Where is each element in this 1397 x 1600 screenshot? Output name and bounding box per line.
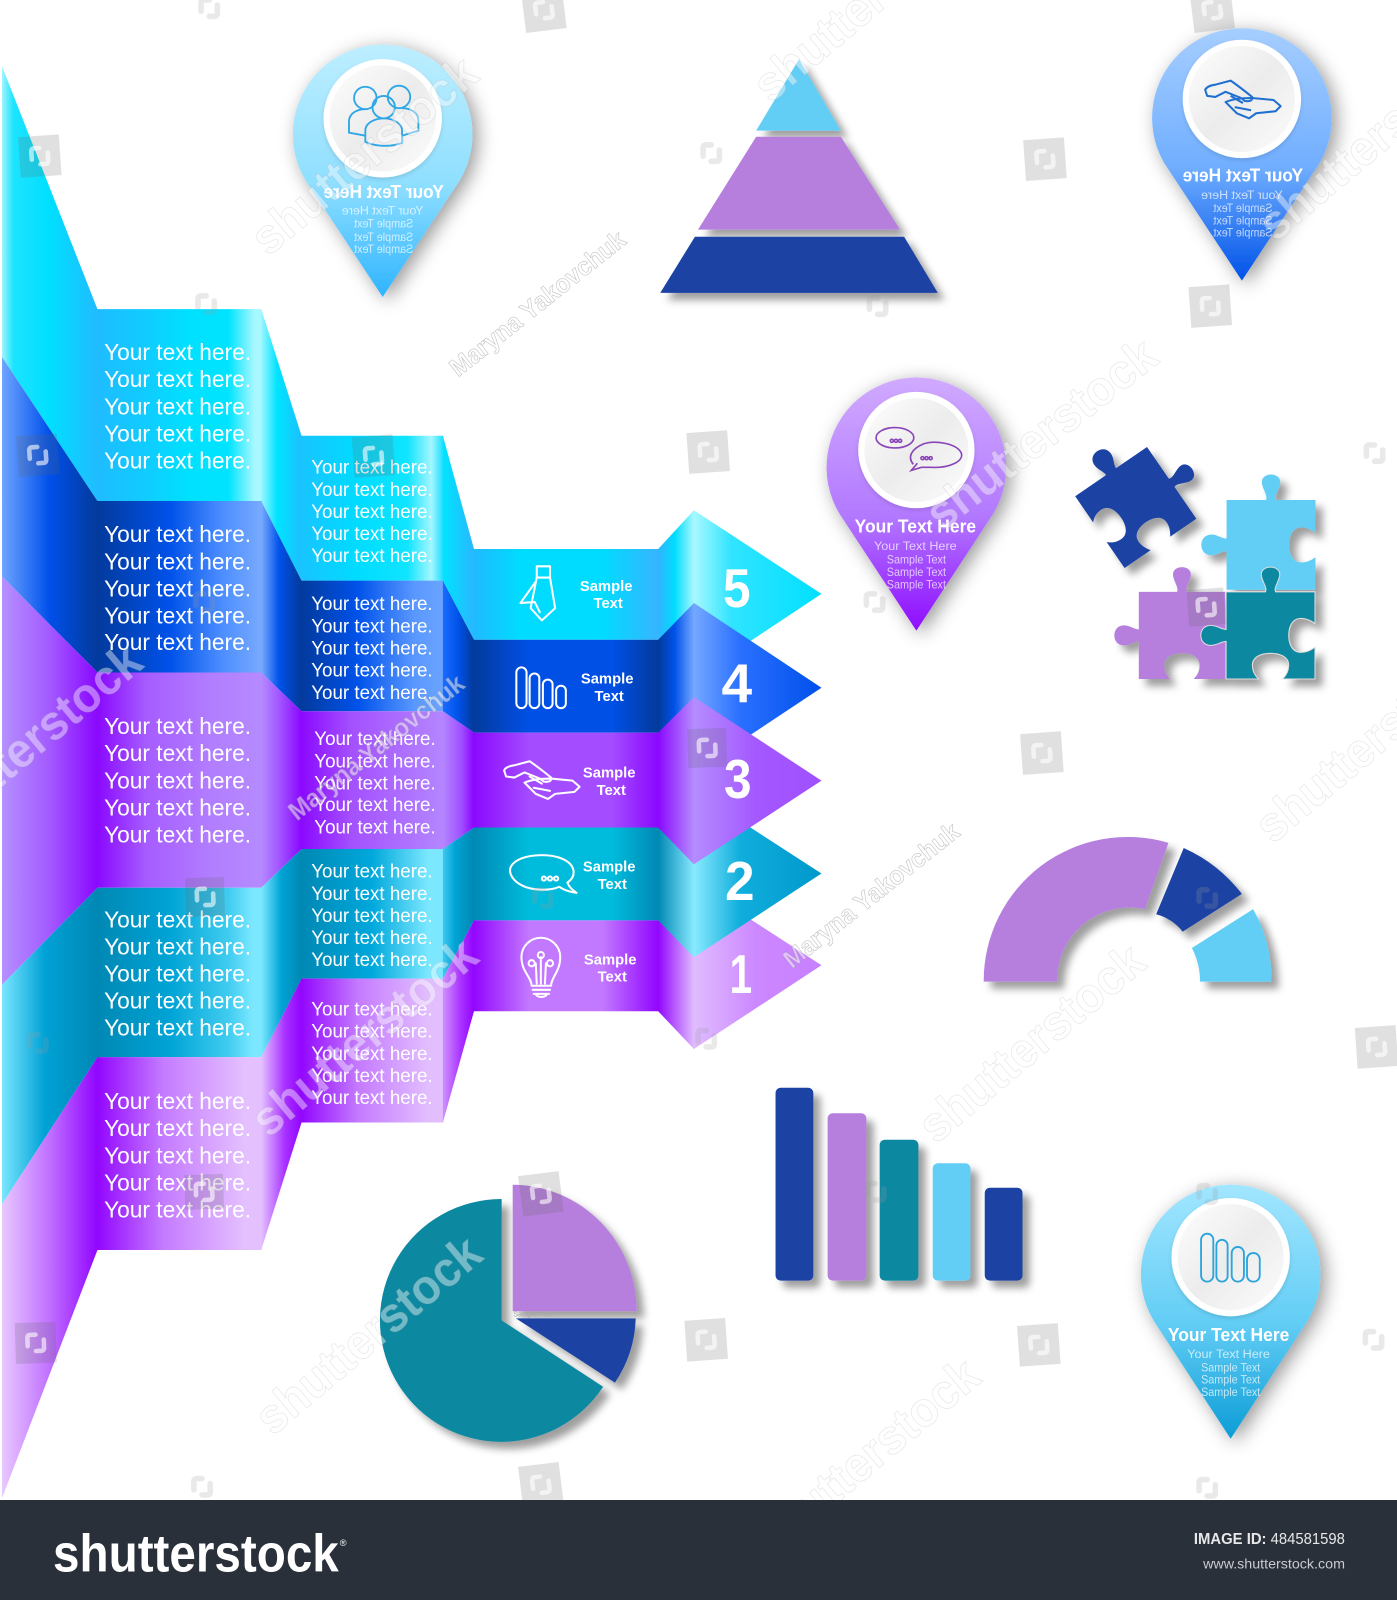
ribbon column 3 text: Your text here. — [311, 1065, 433, 1087]
arrow numbers: 3 — [724, 748, 752, 810]
strip labels: Text — [597, 783, 626, 799]
bar 1 — [776, 1088, 813, 1281]
folded ribbon chart — [2, 66, 821, 1498]
ribbon column 3 text: Your text here. — [311, 861, 433, 883]
ribbon column 3 text: Your text here. — [311, 1021, 433, 1043]
mirrored pin text: Sample Text — [1213, 226, 1273, 240]
watermark wordmarks: shutterstock — [241, 927, 489, 1147]
ribbon column 3 text: Your text here. — [314, 794, 436, 816]
ribbon column 2 text: Your text here. — [104, 821, 251, 847]
watermark wordmarks: shutterstock — [908, 933, 1156, 1153]
ribbon column 2 text: Your text here. — [104, 907, 251, 933]
ribbon column 2 text: Your text here. — [104, 393, 251, 419]
donut gauge chart — [984, 837, 1271, 982]
ribbon column 2 text: Your text here. — [104, 1015, 251, 1041]
ribbon column 3 text: Your text here. — [314, 728, 436, 750]
website: www.shutterstock.com — [1202, 1556, 1345, 1572]
ribbon column 3 text: Your text here. — [314, 817, 436, 839]
mirrored pin text: Sample Text — [1213, 201, 1273, 215]
strip labels: Sample — [583, 766, 636, 782]
pin text: Sample Text — [887, 552, 946, 566]
pin text: Your Text Here — [874, 539, 957, 553]
ribbon column 3 text: Your text here. — [311, 638, 433, 660]
ribbon column 2 text: Your text here. — [104, 602, 251, 628]
ribbon column 2 text: Your text here. — [104, 1142, 251, 1168]
strip labels: Sample — [581, 672, 633, 688]
donut segment: purple — [984, 837, 1168, 982]
bar 5 — [985, 1188, 1022, 1281]
pin text: Your Text Here — [1168, 1324, 1289, 1345]
icon: speech bubbles — [876, 428, 962, 470]
mirrored pin text — [1183, 165, 1303, 240]
ribbon column 2 text: Your text here. — [104, 740, 251, 766]
icon: hands — [1205, 81, 1281, 118]
ribbon band: teal — [2, 828, 659, 1204]
ribbon column 2 text: Your text here. — [104, 961, 251, 987]
ribbon column 2 text: Your text here. — [104, 934, 251, 960]
pin text: Sample Text — [1201, 1385, 1261, 1399]
pie chart — [380, 1185, 637, 1442]
icon: speech bubble — [510, 855, 577, 893]
icon: people — [349, 86, 418, 146]
ribbon column 2 text: Your text here. — [104, 575, 251, 601]
pin text: Your Text Here — [1187, 1347, 1270, 1361]
bar 2 — [828, 1113, 866, 1281]
ribbon column 3 text: Your text here. — [311, 883, 433, 905]
ribbon column 3 text: Your text here. — [311, 998, 433, 1020]
pin body — [1141, 1185, 1320, 1439]
strip labels — [580, 579, 637, 986]
ribbon column 2 text: Your text here. — [104, 629, 251, 655]
ribbon column 3 text: Your text here. — [311, 523, 433, 545]
ribbon band: purple — [2, 577, 659, 985]
arrow 2 — [658, 791, 821, 957]
watermark wordmarks: Maryna Yakovchuk — [444, 225, 632, 382]
pie slice: blue — [516, 1318, 636, 1383]
ribbon column 2 text: Your text here. — [104, 420, 251, 446]
watermark wordmarks: shutterstock — [743, 1347, 991, 1568]
icon: hands — [504, 761, 580, 799]
pin disc — [1186, 43, 1298, 155]
ribbon column 3 text: Your text here. — [311, 593, 433, 615]
location pin: bars — [1141, 1185, 1320, 1439]
pin text — [1168, 1324, 1289, 1399]
ribbon column 2 text: Your text here. — [104, 366, 251, 392]
pin body — [827, 378, 1006, 631]
pin body — [293, 45, 472, 297]
arrow 1 — [658, 883, 821, 1049]
puzzle piece: dark blue — [1061, 413, 1217, 568]
pie slice: teal — [380, 1199, 603, 1442]
arrow numbers: 5 — [723, 557, 751, 619]
icon: bars — [1201, 1234, 1260, 1282]
arrow numbers — [721, 557, 755, 1005]
location pin: speech — [827, 378, 1006, 631]
ribbon column 3 text: Your text here. — [311, 660, 433, 682]
watermark wordmarks: shutterstock — [245, 1225, 493, 1445]
ribbon column 3 text: Your text here. — [311, 479, 433, 501]
pin disc — [327, 62, 439, 174]
ribbon column 3 text: Your text here. — [311, 682, 433, 704]
pyramid bottom tier — [660, 237, 938, 293]
mirrored pin text: Your Text Here — [1201, 188, 1283, 202]
ribbon column 3 text: Your text here. — [311, 905, 433, 927]
ribbon band: blue — [2, 357, 659, 733]
ribbon column 3 text: Your text here. — [314, 772, 436, 794]
footer bar — [0, 1500, 1397, 1600]
icon: light bulb — [521, 938, 560, 997]
bar 3 — [880, 1140, 918, 1281]
mirrored pin text: Your Text Here — [342, 203, 423, 217]
pie hidden caption: Sample Text — [513, 1310, 552, 1318]
watermark wordmarks: shutterstock — [915, 327, 1168, 541]
pin text: Sample Text — [887, 577, 946, 591]
mirrored pin text: Sample Text — [354, 217, 413, 231]
ribbon column 2 text — [104, 339, 251, 1222]
ribbon column 2 text: Your text here. — [104, 548, 251, 574]
ribbon column 3 text: Your text here. — [314, 750, 436, 772]
pin disc — [861, 395, 971, 505]
pyramid chart — [660, 59, 938, 293]
pyramid middle tier — [698, 137, 900, 230]
footer logo: shutterstock — [53, 1524, 339, 1583]
strip labels: Sample — [583, 859, 636, 875]
ribbon column 2 text: Your text here. — [104, 713, 251, 739]
ribbon column 3 text: Your text here. — [311, 545, 433, 567]
location pin: hands — [1152, 28, 1332, 281]
arrow 3 — [658, 697, 821, 864]
ribbon band: light purple — [2, 920, 659, 1498]
strip labels: Text — [595, 689, 624, 705]
mirrored pin text: Sample Text — [354, 230, 413, 244]
ribbon column 3 text — [311, 456, 436, 1109]
bar 4 — [933, 1163, 970, 1281]
pie slice: purple — [513, 1185, 637, 1311]
arrow numbers: 1 — [730, 943, 752, 1005]
mirrored pin text: Sample Text — [354, 242, 413, 256]
pyramid top tier — [756, 59, 841, 131]
mirrored pin text — [323, 181, 444, 256]
pin text: Your Text Here — [855, 516, 976, 537]
pin text: Sample Text — [887, 565, 946, 579]
mirrored pin text: Sample Text — [1213, 213, 1273, 227]
puzzle pieces — [1061, 413, 1315, 679]
image id: IMAGE ID: 484581598 — [1194, 1531, 1345, 1548]
donut segment: blue — [1156, 848, 1242, 932]
ribbon column 3 text: Your text here. — [311, 1043, 433, 1065]
ribbon column 2 text: Your text here. — [104, 1088, 251, 1114]
ribbon column 3 text: Your text here. — [311, 456, 433, 478]
mirrored pin text: Your Text Here — [323, 181, 444, 202]
donut segment: light blue — [1192, 909, 1271, 982]
watermark wordmarks: shutterstock — [241, 45, 489, 266]
ribbon column 3 text: Your text here. — [311, 927, 433, 949]
ribbon column 2 text: Your text here. — [104, 794, 251, 820]
arrow 5 — [658, 510, 821, 679]
puzzle piece: purple — [1114, 567, 1225, 679]
ribbon band: cyan — [2, 66, 659, 640]
ribbon column 2 text: Your text here. — [104, 988, 251, 1014]
strip labels: Sample — [580, 579, 632, 595]
watermark wordmarks: Maryna Yakovchuk — [283, 669, 471, 826]
mirrored pin text: Your Text Here — [1183, 165, 1303, 186]
strip labels: Text — [598, 877, 627, 893]
watermark wordmarks: Maryna Yakovchuk — [778, 817, 966, 974]
bar chart — [776, 1088, 1022, 1281]
pin disc — [1175, 1201, 1287, 1313]
pin text: Sample Text — [1201, 1373, 1261, 1387]
ribbon column 2 text: Your text here. — [104, 767, 251, 793]
ribbon column 2 text: Your text here. — [104, 1196, 251, 1222]
pin text — [855, 516, 976, 591]
pin body — [1152, 28, 1332, 281]
ribbon column 3 text: Your text here. — [311, 501, 433, 523]
strip labels: Sample — [584, 952, 637, 968]
icon: bars — [516, 667, 566, 708]
strip labels: Text — [594, 596, 623, 612]
ribbon column 2 text: Your text here. — [104, 1115, 251, 1141]
pin text: Sample Text — [1201, 1360, 1261, 1374]
ribbon column 3 text: Your text here. — [311, 616, 433, 638]
footer logo: ® — [340, 1538, 347, 1548]
ribbon column 2 text: Your text here. — [104, 447, 251, 473]
puzzle piece: light blue — [1201, 474, 1315, 590]
arrow 4 — [658, 603, 821, 772]
ribbon column 3 text: Your text here. — [311, 1087, 433, 1109]
strip labels: Text — [598, 970, 627, 986]
ribbon column 2 text: Your text here. — [104, 339, 251, 365]
icon: tie — [520, 566, 555, 620]
puzzle piece: teal — [1201, 567, 1315, 679]
arrow numbers: 4 — [721, 652, 752, 714]
arrow numbers: 2 — [725, 850, 755, 912]
ribbon column 2 text: Your text here. — [104, 521, 251, 547]
location pin: people — [293, 45, 472, 297]
ribbon column 2 text: Your text here. — [104, 1169, 251, 1195]
ribbon column 3 text: Your text here. — [311, 949, 433, 971]
